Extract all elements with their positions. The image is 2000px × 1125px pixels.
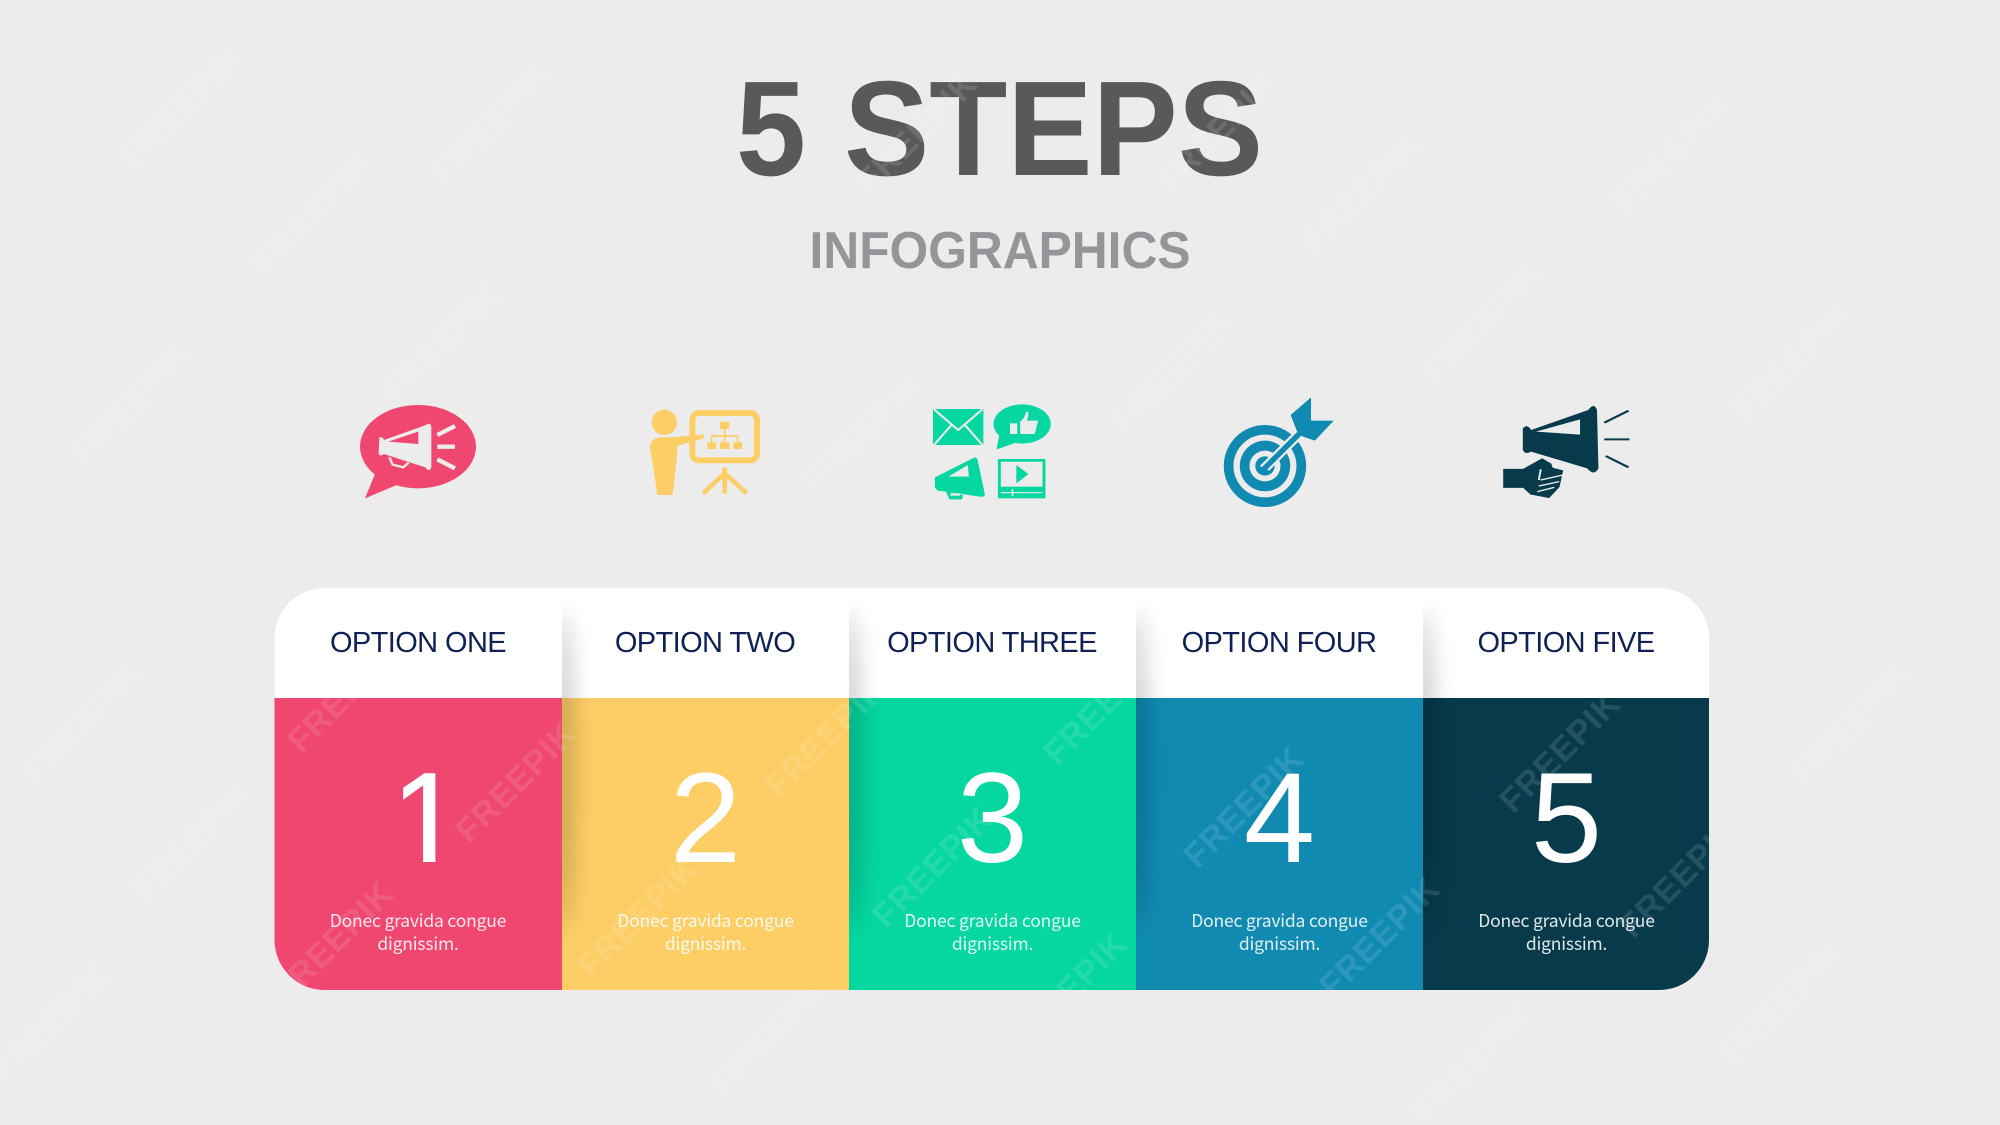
text: FREEPIK (849, 64, 985, 200)
panel: option five: dignissim. (1526, 931, 1607, 956)
thumbs up bubble (994, 404, 1051, 449)
text: FREEPIK (64, 334, 200, 470)
panel: option two: 2 (670, 747, 741, 890)
title: STEPS (844, 53, 1263, 204)
text: FREEPIK (1414, 254, 1550, 390)
text: FREEPIK (1714, 934, 1850, 1070)
panel: option two: Donec gravida congue (617, 908, 794, 933)
steps table: FREEPIK (280, 624, 416, 760)
panel: option five: 5 (1531, 747, 1602, 890)
steps table: FREEPIK (570, 849, 706, 985)
panel: option five: OPTION FIVE (1477, 627, 1655, 659)
small megaphone (935, 457, 985, 499)
steps table: FREEPIK (1612, 809, 1748, 945)
title: 5 (736, 53, 806, 204)
panel: option four: dignissim. (1239, 931, 1320, 956)
icon: megaphone speech bubble (360, 405, 476, 498)
steps table: FREEPIK (265, 874, 401, 1010)
panel: option one: OPTION ONE (330, 627, 506, 659)
text: FREEPIK (704, 964, 840, 1100)
panel: option four: OPTION FOUR (1182, 627, 1376, 659)
panel: option five: Donec gravida congue (1478, 908, 1655, 933)
steps table: FREEPIK (1176, 739, 1312, 875)
panel: option two: OPTION TWO (615, 627, 795, 659)
icon: media collage (933, 404, 1051, 499)
text: FREEPIK (1149, 64, 1285, 200)
text: FREEPIK (244, 144, 380, 280)
steps table: FREEPIK (999, 924, 1135, 1060)
icon: presenter with board (650, 410, 757, 495)
text: FREEPIK (1784, 654, 1920, 790)
panel: option three: OPTION THREE (887, 627, 1097, 659)
panel: option four: 4 (1244, 747, 1315, 890)
steps table: FREEPIK (1036, 636, 1172, 772)
panel: option one (330, 627, 506, 956)
text: FREEPIK (794, 364, 930, 500)
steps table: FREEPIK (758, 669, 894, 805)
text: FREEPIK (1604, 84, 1740, 220)
steps table (274, 588, 1709, 990)
panel: option four: Donec gravida congue (1191, 908, 1368, 933)
panel: option three: dignissim. (952, 931, 1033, 956)
text: FREEPIK (1724, 294, 1860, 430)
text: FREEPIK (124, 774, 260, 910)
panel: option two (615, 627, 795, 956)
icon: hand holding megaphone (1502, 406, 1629, 499)
video player (998, 459, 1045, 498)
panel: option one: dignissim. (377, 931, 459, 956)
envelope (933, 409, 983, 445)
text: FREEPIK (374, 274, 510, 410)
text: FREEPIK (114, 39, 250, 175)
panel: option three: Donec gravida congue (904, 908, 1081, 933)
panel: option five (1477, 627, 1655, 956)
steps table: FREEPIK (448, 714, 584, 850)
text: FREEPIK (424, 54, 560, 190)
text: FREEPIK (14, 654, 150, 790)
subtitle: INFOGRAPHICS (810, 222, 1190, 280)
steps table: FREEPIK (1492, 684, 1628, 820)
panel: option three (887, 627, 1097, 956)
panel: option three: 3 (957, 747, 1028, 890)
panel: option two: dignissim. (665, 931, 746, 956)
steps table: FREEPIK (1312, 869, 1448, 1005)
text: FREEPIK (1294, 124, 1430, 260)
steps table: FREEPIK (865, 799, 1001, 935)
panel: option one: 1 (391, 747, 463, 890)
icon: target with arrow (1224, 397, 1334, 507)
text: FREEPIK (1104, 304, 1240, 440)
panel: option four (1182, 627, 1376, 956)
panel: option one: Donec gravida congue (330, 908, 506, 933)
